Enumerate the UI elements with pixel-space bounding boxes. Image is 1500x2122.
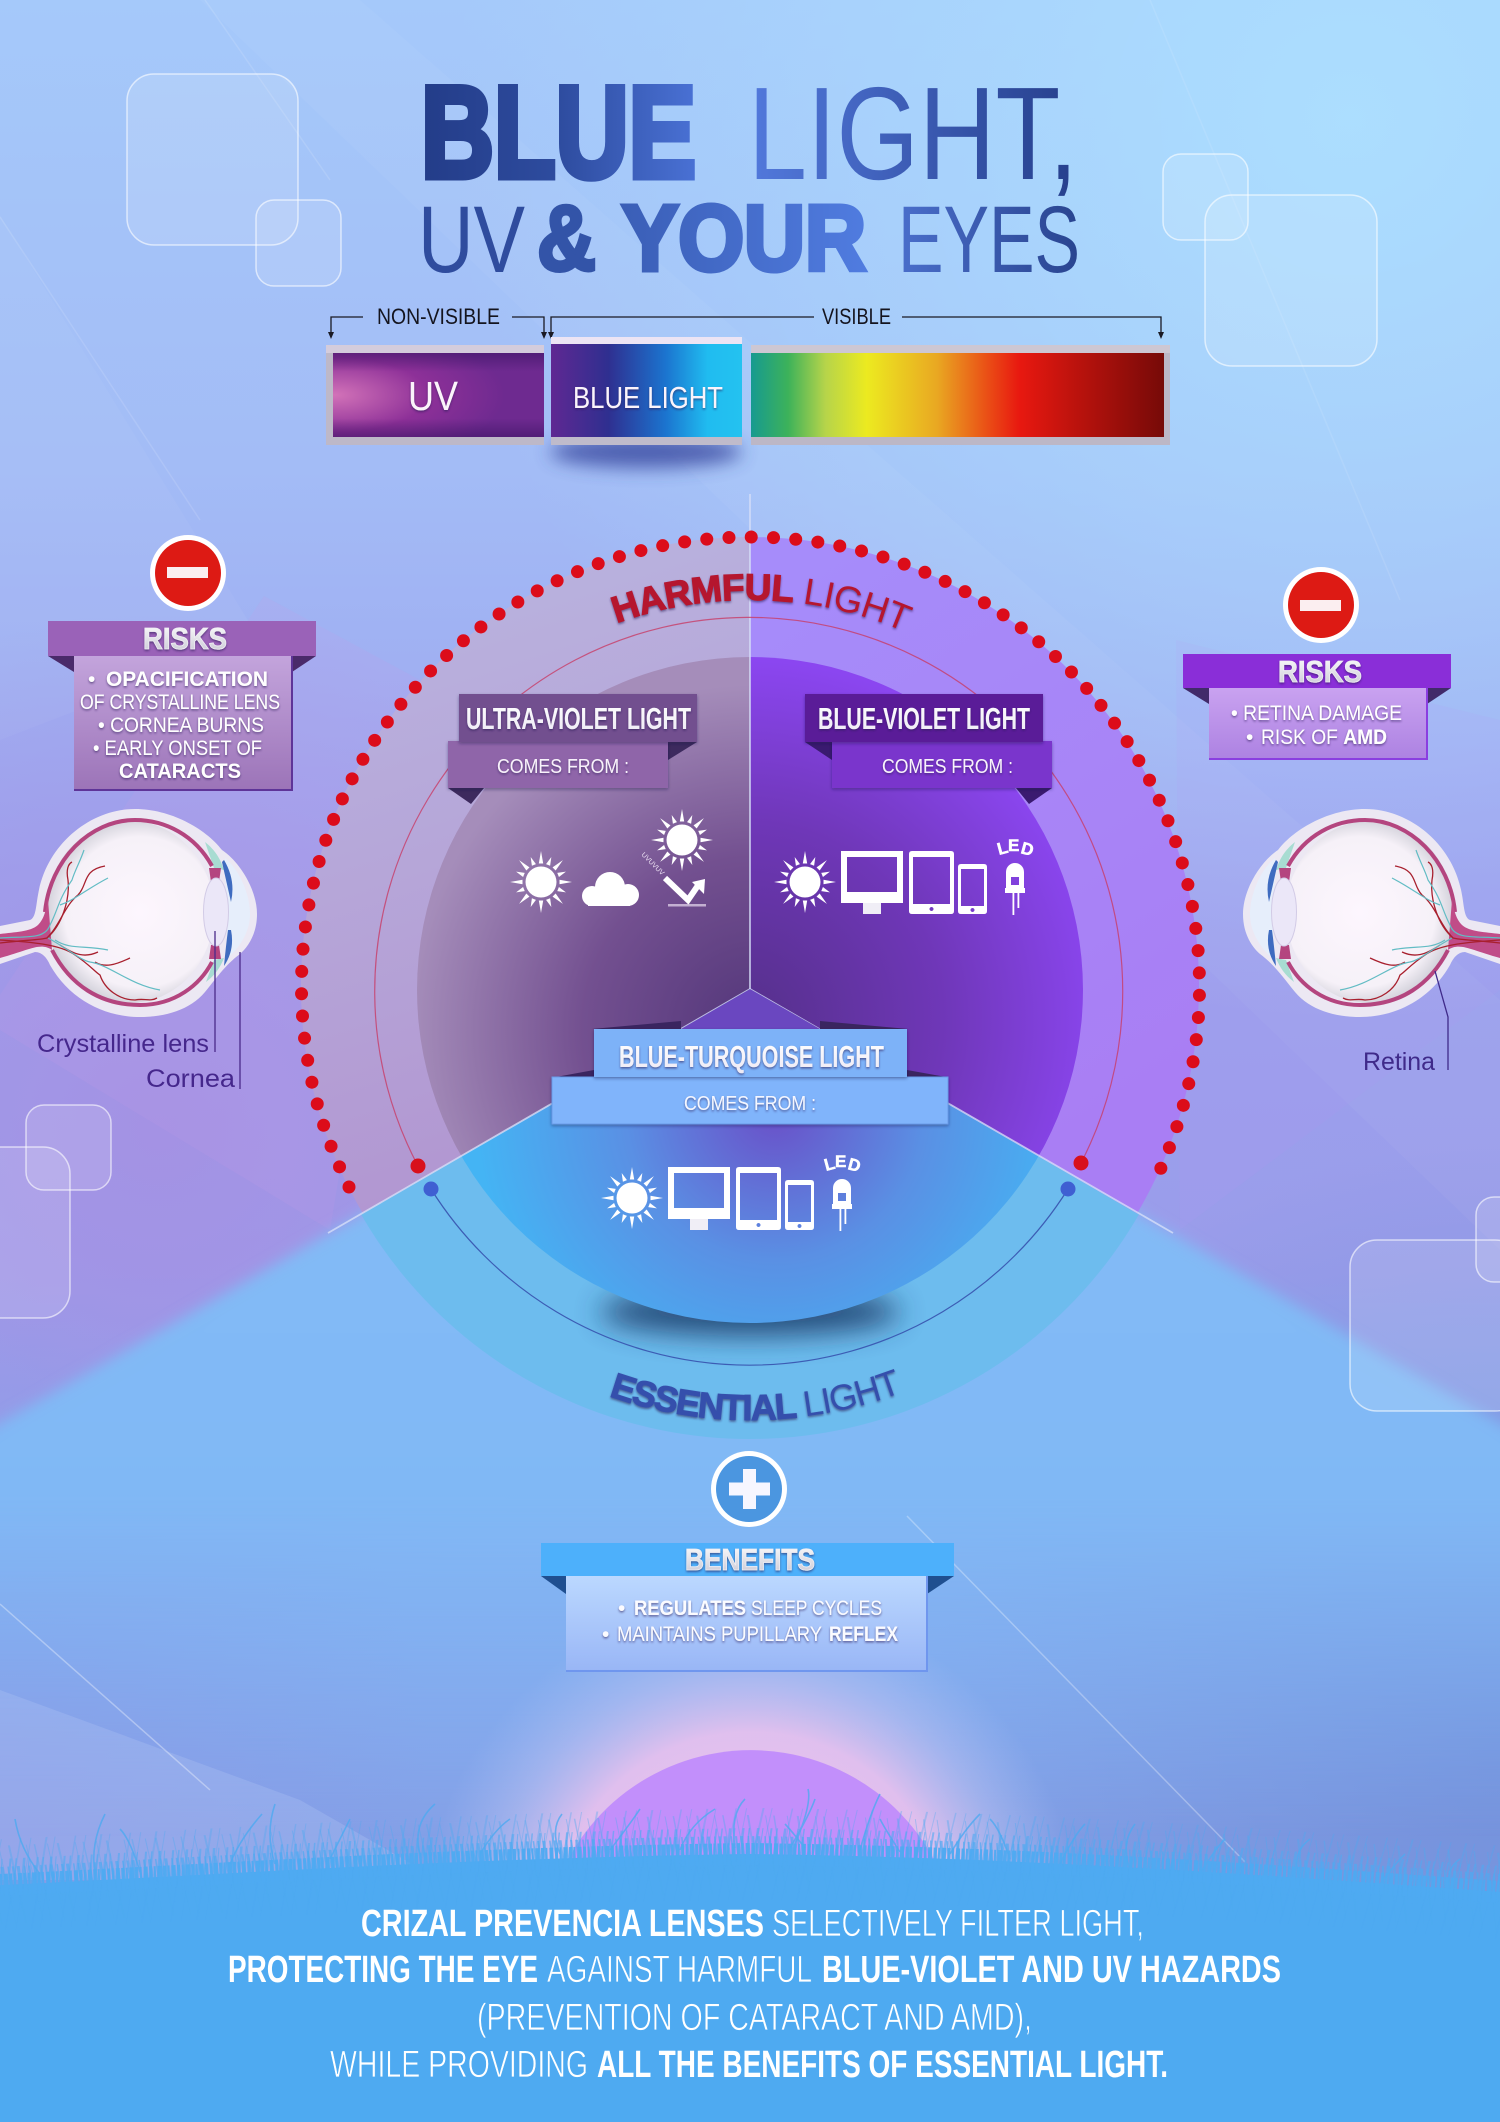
title: BLUE [421, 59, 696, 205]
decorative rounded squares [0, 74, 1500, 1411]
footer text [228, 1903, 1281, 2086]
risks list: OF CRYSTALLINE LENS [80, 691, 280, 714]
title: LIGHT, [748, 60, 1078, 207]
label: crystalline lens: Crystalline lens [37, 1030, 209, 1058]
essential light band [362, 1156, 1139, 1439]
icon: no entry [150, 535, 226, 611]
UV box [326, 345, 544, 445]
risks list [1231, 702, 1402, 749]
icon: sun [601, 1167, 663, 1229]
risks list [80, 668, 280, 783]
icon: LED [822, 1152, 863, 1231]
harmful thin arc with end dots [375, 617, 1123, 1174]
benefits banner: BENEFITS [685, 1542, 815, 1577]
risks list: CATARACTS [119, 760, 241, 783]
footer text: AGAINST HARMFUL [547, 1949, 812, 1991]
sphere shadow [600, 1288, 900, 1336]
panel: blue-violet light [774, 694, 1052, 915]
risks list: • [1246, 726, 1253, 749]
icon: LED: LED [995, 836, 1036, 860]
purple tip above blue banner [681, 989, 820, 1029]
footer text: SELECTIVELY FILTER LIGHT, [772, 1903, 1144, 1945]
blue-violet banner [805, 694, 1052, 804]
icon: plus [711, 1451, 787, 1527]
icon: sun [510, 851, 572, 913]
risks list: • RETINA DAMAGE [1231, 702, 1402, 725]
risks list: • CORNEA BURNS [98, 714, 264, 737]
icon: phone [785, 1180, 814, 1230]
footer text: WHILE PROVIDING [330, 2044, 588, 2086]
harmful zone halo left [301, 537, 750, 1212]
title: UV [418, 187, 525, 293]
risks list: • EARLY ONSET OF [93, 737, 262, 760]
icon: sun reflected [651, 809, 713, 871]
panel: blue-turquoise light [552, 1021, 948, 1231]
sphere lower wedge [462, 1104, 1038, 1323]
essential thin arc with end dots [424, 1182, 1076, 1365]
panel: left risks [48, 535, 316, 790]
UV box: UV [408, 373, 459, 419]
icon: tablet [736, 1167, 781, 1230]
icon: monitor [841, 851, 903, 914]
risks banner: RISKS [1278, 654, 1362, 689]
benefits list: • [618, 1597, 625, 1620]
benefits list: REGULATES [634, 1597, 746, 1620]
footer text: (PREVENTION OF CATARACT AND AMD), [477, 1997, 1032, 2039]
title: YOUR [622, 186, 866, 290]
blue light box: BLUE LIGHT [573, 380, 723, 415]
title: EYES [898, 187, 1080, 293]
ultra-violet banner: COMES FROM : [497, 756, 629, 778]
divider lines [328, 494, 1173, 1233]
icon: tablet [909, 851, 954, 914]
footer text: PROTECTING THE EYE [228, 1949, 538, 1991]
footer text: BLUE-VIOLET AND UV HAZARDS [822, 1949, 1281, 1991]
benefits list: • [602, 1623, 609, 1646]
title: & [537, 186, 596, 290]
benefits list [602, 1597, 898, 1646]
benefits list: MAINTAINS PUPILLARY [617, 1623, 822, 1646]
visible bracket [548, 304, 1164, 339]
eye diagram right [1243, 809, 1500, 1076]
visible rainbow box [751, 345, 1170, 445]
harmful dotted arc [302, 537, 1200, 1187]
benefits list: SLEEP CYCLES [751, 1597, 882, 1620]
panel: ultra-violet light [448, 694, 713, 913]
blue-turquoise banner: BLUE-TURQUOISE LIGHT [619, 1039, 884, 1074]
blue-turquoise banner: COMES FROM : [684, 1093, 816, 1115]
title [418, 59, 1080, 293]
icon: cloud [582, 872, 639, 906]
ultra-violet banner [448, 694, 697, 804]
benefits list: REFLEX [829, 1623, 898, 1646]
risks list: OPACIFICATION [106, 668, 268, 691]
non-visible bracket: NON-VISIBLE [377, 304, 500, 329]
icon: reflected UV arrow: UVUVUV [640, 851, 665, 877]
icon: LED [995, 836, 1036, 915]
risks banner [1183, 654, 1451, 759]
panel: benefits [541, 1451, 954, 1671]
eye diagram left [0, 809, 257, 1093]
icon: phone [958, 864, 987, 914]
heading: harmful light: HARMFUL LIGHT [609, 574, 914, 630]
risks banner [48, 621, 316, 790]
visible bracket: VISIBLE [822, 304, 891, 329]
label: cornea: Cornea [146, 1065, 235, 1093]
harmful zone halo right [750, 537, 1199, 1214]
icon: reflected UV arrow [640, 851, 706, 906]
panel: right risks [1183, 567, 1451, 759]
risks list: • [88, 668, 95, 691]
setting sun [551, 1750, 951, 1900]
blue-violet banner: BLUE-VIOLET LIGHT [818, 701, 1030, 736]
sphere upper left [417, 657, 750, 1155]
sphere upper right [750, 657, 1083, 1156]
non-visible bracket [328, 304, 547, 339]
blue light box [551, 337, 742, 445]
footer text: ALL THE BENEFITS OF ESSENTIAL LIGHT. [597, 2044, 1168, 2086]
risks list: RISK OF AMD [1261, 726, 1387, 749]
ultra-violet banner: ULTRA-VIOLET LIGHT [466, 701, 691, 736]
grass and footer band [0, 1789, 1500, 2122]
spectrum bar [326, 304, 1170, 468]
label: retina: Retina [1363, 1048, 1435, 1076]
benefits banner [541, 1542, 954, 1671]
risks banner: RISKS [143, 621, 227, 656]
icon: monitor [668, 1167, 730, 1230]
icon: sun [774, 851, 836, 913]
blue-violet banner: COMES FROM : [882, 756, 1013, 778]
icon: LED: LED [822, 1152, 863, 1176]
icon: no entry [1283, 567, 1359, 643]
long grass blades [15, 1789, 1460, 1889]
heading: essential light: ESSENTIAL LIGHT [609, 1369, 896, 1424]
label: retina [1363, 971, 1448, 1076]
blue-turquoise banner [552, 1021, 948, 1124]
footer text: CRIZAL PREVENCIA LENSES [361, 1903, 764, 1945]
